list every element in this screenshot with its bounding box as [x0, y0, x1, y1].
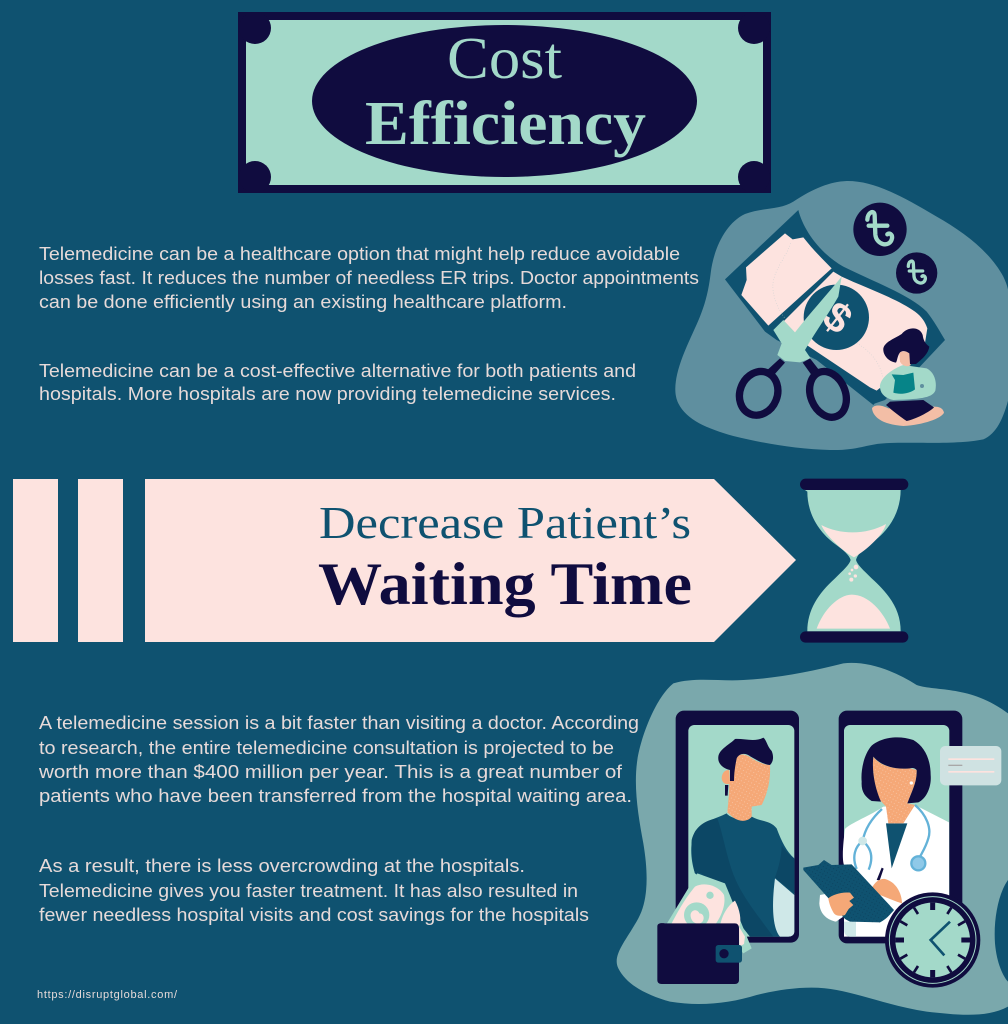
icon: coin large — [853, 203, 907, 256]
title: Efficiency: Efficiency — [365, 90, 646, 158]
doctor — [843, 737, 949, 937]
text block: faster session: worth more than $400 million per year. This is a great number of — [38, 762, 623, 782]
heading: Decrease Patient's: Decrease Patient’s — [319, 497, 691, 548]
text block: less overcrowding: Telemedicine gives you faster treatment. It has also resulted in — [39, 881, 578, 901]
icon: hourglass — [800, 479, 908, 643]
heading: Waiting Time: Waiting Time — [318, 551, 692, 617]
heading arrow — [145, 479, 796, 642]
scissors — [733, 277, 853, 423]
text block: less overcrowding — [39, 856, 589, 925]
chat card — [940, 746, 1001, 785]
text block: faster session: to research, the entire telemedicine consultation is projected to be — [39, 738, 614, 758]
text block: telemedicine reduces losses — [39, 244, 699, 312]
text block: telemedicine reduces losses: can be done efficiently using an existing healthcare platform. — [39, 292, 567, 312]
text block: faster session: patients who have been transferred from the hospital waiting area. — [39, 786, 632, 806]
text block: faster session — [38, 713, 639, 806]
text block: telemedicine reduces losses: losses fast. It reduces the number of needless ER trips. Doctor appointments — [39, 268, 699, 288]
phone: doctor — [839, 711, 962, 943]
text block: cost-effective alternative: hospitals. More hospitals are now providing telemedicine services. — [39, 384, 616, 404]
illustration: scissors cutting banknote — [675, 181, 1008, 450]
title: Cost: Cost — [447, 25, 563, 91]
dollar sign: $ — [814, 292, 861, 343]
icon: coin small — [896, 252, 937, 294]
text block: faster session: A telemedicine session is a bit faster than visiting a doctor. According — [39, 713, 639, 733]
stethoscope — [854, 805, 929, 870]
patient — [691, 738, 794, 937]
phone: patient — [676, 711, 799, 943]
title banner — [238, 12, 771, 193]
text block: less overcrowding: As a result, there is less overcrowding at the hospitals. — [39, 856, 525, 876]
text block: telemedicine reduces losses: Telemedicine can be a healthcare option that might help reduce avoidable — [39, 244, 680, 264]
banknote — [725, 210, 945, 405]
illustration: telemedicine consultation — [617, 663, 1008, 1015]
wallet with cash — [657, 873, 752, 984]
text block: cost-effective alternative — [39, 361, 636, 404]
clipboard — [803, 860, 894, 922]
hand — [828, 892, 854, 916]
figure: woman reading — [860, 328, 944, 426]
text block: less overcrowding: fewer needless hospital visits and cost savings for the hospitals — [39, 905, 589, 925]
clock — [885, 892, 980, 988]
text block: cost-effective alternative: Telemedicine can be a cost-effective alternative for both patients and — [39, 361, 636, 381]
decorative bars — [13, 479, 123, 642]
source url: https://disruptglobal.com/ — [37, 989, 178, 1001]
